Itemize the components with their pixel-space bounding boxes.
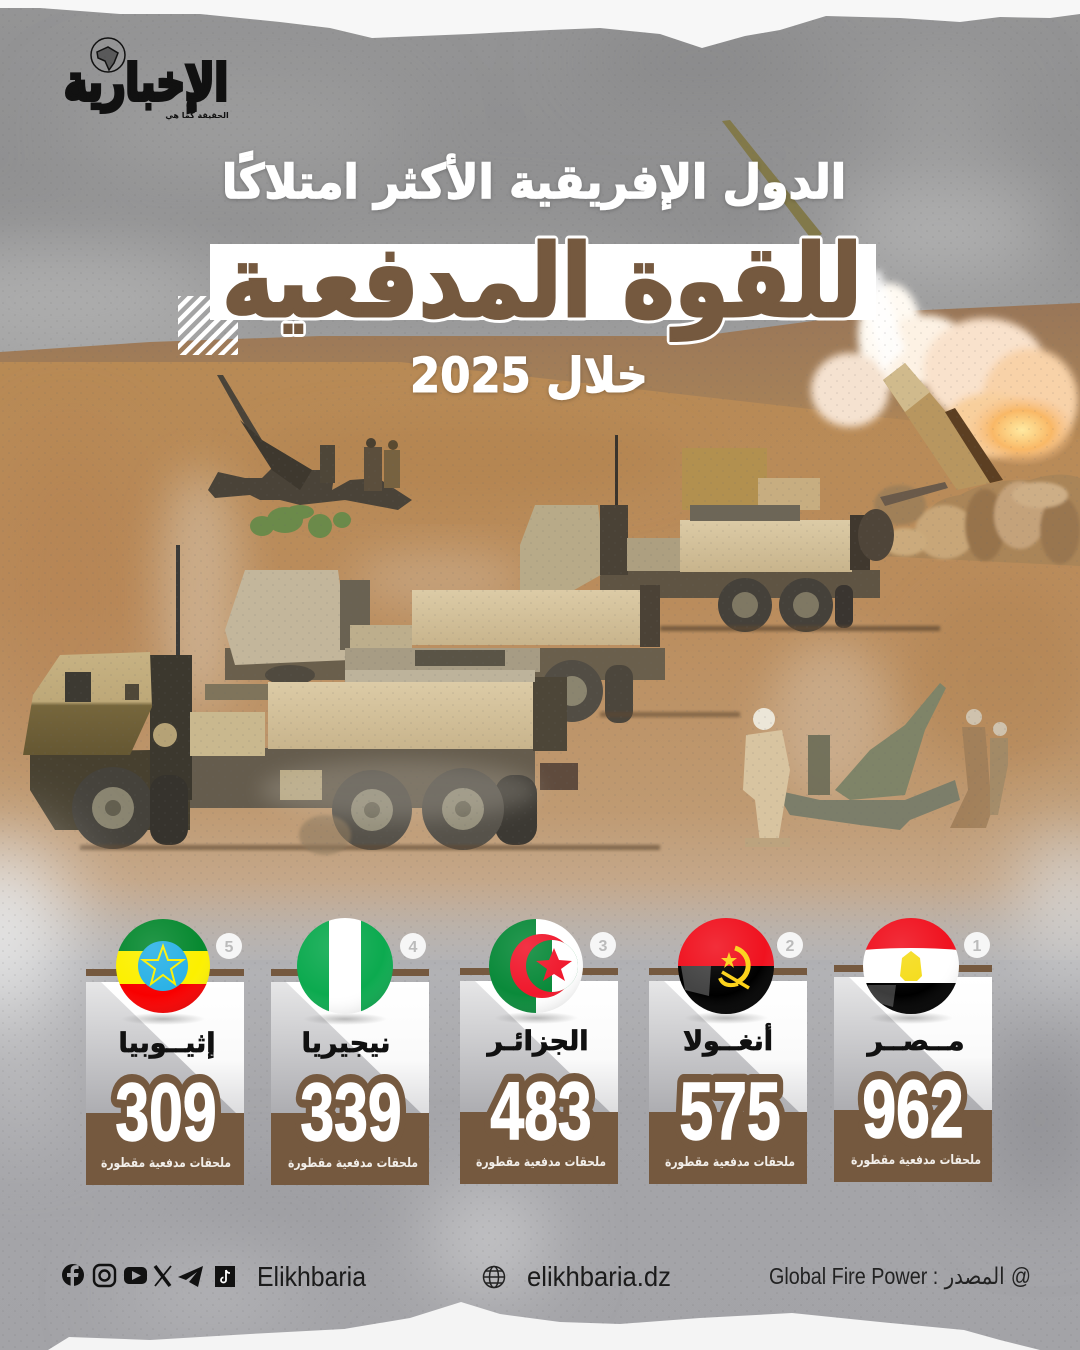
value: 483 [490, 1066, 592, 1157]
card: Nigeria [271, 918, 429, 1185]
country name: نيجيريا [302, 1028, 390, 1059]
card base [86, 1113, 244, 1185]
logo wordmark: الإخبارية [64, 54, 228, 112]
decorative hatch block [178, 296, 238, 355]
rank badge [964, 932, 990, 958]
icon: x [155, 1266, 171, 1286]
rank badge: 1 [973, 938, 982, 955]
flag shadow [684, 1012, 768, 1024]
rocket launcher and blast [722, 120, 1080, 566]
top bar [834, 965, 992, 972]
country name: مــصــر [865, 1026, 965, 1057]
unit label: ملحقات مدفعية مقطورة [476, 1155, 606, 1170]
rank badge [400, 933, 426, 959]
rank badge: 2 [786, 938, 795, 955]
background: desert ground [0, 362, 1080, 960]
title line 1: الدول الإفريقية الأكثر امتلاكًا [222, 151, 846, 210]
banner background [210, 244, 876, 320]
rank badge: 5 [225, 939, 234, 956]
top bar [460, 968, 618, 975]
unit label: ملحقات مدفعية مقطورة [288, 1156, 418, 1171]
card: Algeria [460, 918, 618, 1184]
logo tagline: الحقيقة كما هي [165, 111, 229, 120]
flag: Nigeria [297, 918, 393, 1014]
card base [271, 1113, 429, 1185]
background: distant hills [0, 303, 1080, 440]
top bar [86, 969, 244, 976]
banner text outline: للقوة المدفعية [222, 223, 862, 341]
icon: youtube [124, 1267, 147, 1284]
soldiers right [966, 709, 982, 725]
rank badge [590, 932, 616, 958]
value: 483 [490, 1066, 592, 1157]
value: 962 [862, 1064, 964, 1155]
flag: Ethiopia [115, 918, 211, 1016]
country name: إثيــوبيا [118, 1028, 216, 1059]
blast smoke [811, 283, 1078, 457]
bottom cloud fade [0, 830, 1080, 1350]
icon: telegram [178, 1266, 203, 1287]
top bar [649, 968, 807, 975]
flag shadow [303, 1013, 387, 1025]
card body [834, 977, 992, 1110]
howitzer rear left [208, 375, 412, 538]
value: 309 [115, 1067, 217, 1158]
launcher pod [883, 363, 1003, 490]
unit label: ملحقات مدفعية مقطورة [101, 1156, 231, 1171]
torn paper top edge [0, 0, 1080, 48]
card: Ethiopia [86, 918, 244, 1185]
card body [649, 981, 807, 1112]
icon: instagram [94, 1265, 115, 1286]
card base [460, 1112, 618, 1184]
unit label: ملحقات مدفعية مقطورة [665, 1155, 795, 1170]
footer: web icon [484, 1266, 504, 1288]
logo [64, 38, 229, 120]
flag shadow [494, 1012, 578, 1024]
rocket [722, 120, 822, 240]
card body [460, 981, 618, 1112]
front rocket truck [23, 545, 660, 855]
country name: الجزائـر [485, 1026, 589, 1057]
icon: tiktok [215, 1266, 235, 1287]
launcher arm [880, 482, 948, 506]
footer: source: Global Fire Power : المصدر @ [769, 1263, 1031, 1290]
card: Egypt [834, 918, 992, 1182]
banner text: للقوة المدفعية [222, 223, 862, 341]
flag: Algeria [489, 918, 584, 1014]
footer: website: elikhbaria.dz [527, 1261, 671, 1292]
card body [271, 982, 429, 1113]
value: 575 [679, 1066, 781, 1157]
value: 339 [300, 1067, 402, 1158]
torn paper bottom edge [48, 1302, 1040, 1350]
footer: social icons [62, 1264, 235, 1287]
title year: خلال 2025 [410, 348, 648, 404]
rank badge [777, 932, 803, 958]
middle rocket truck [225, 570, 740, 723]
value: 339 [300, 1067, 402, 1158]
card body [86, 982, 244, 1113]
card base [834, 1110, 992, 1182]
value: 575 [679, 1066, 781, 1157]
footer: handle: Elikhbaria [257, 1261, 366, 1292]
icon: globe [91, 38, 125, 72]
card base [649, 1112, 807, 1184]
value: 962 [862, 1064, 964, 1155]
flag shadow [121, 1013, 205, 1025]
dust cloud [874, 474, 1080, 566]
rear rocket truck [520, 435, 940, 632]
top bar [271, 969, 429, 976]
flag shadow [869, 1012, 953, 1024]
country name: أنغــولا [683, 1023, 773, 1057]
value: 309 [115, 1067, 217, 1158]
background: sky with clouds [0, 0, 1080, 370]
card: Angola [649, 918, 807, 1184]
rank badge: 4 [409, 939, 418, 956]
flag: Angola [678, 918, 774, 1014]
flag: Egypt [863, 918, 959, 1017]
soldier left [753, 708, 775, 730]
howitzer front right with soldiers [743, 683, 1008, 847]
rank badge: 3 [599, 938, 608, 955]
rank badge [216, 933, 242, 959]
title banner [210, 223, 876, 341]
rocket trail [860, 270, 905, 372]
icon: facebook [62, 1264, 84, 1287]
unit label: ملحقات مدفعية مقطورة [851, 1153, 981, 1168]
